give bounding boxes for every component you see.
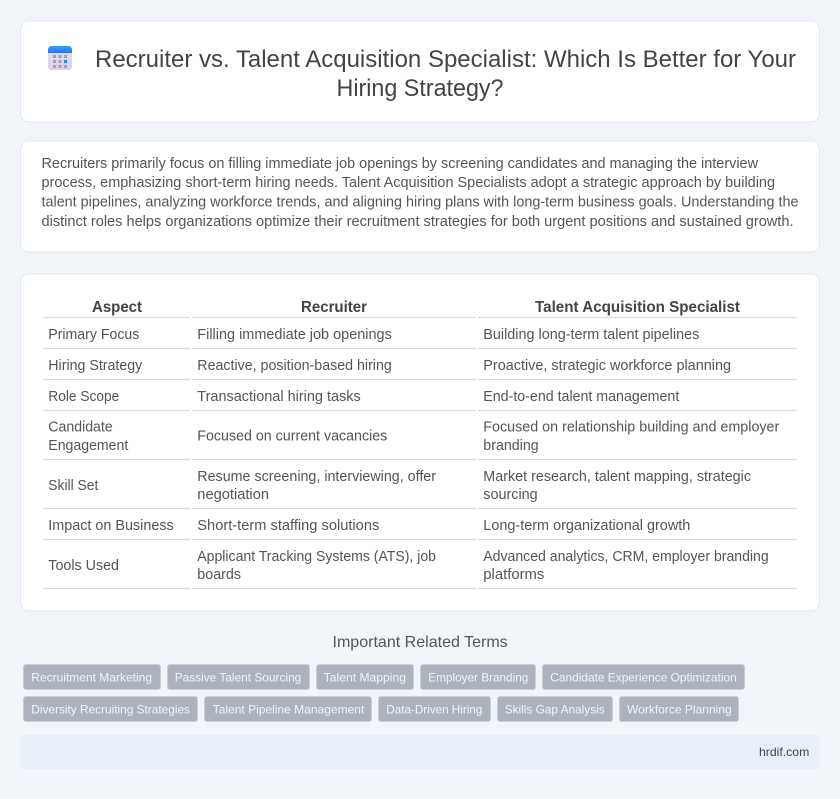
footer bbox=[20, 735, 820, 769]
tag bbox=[24, 664, 160, 690]
panel: introduction bbox=[20, 141, 820, 252]
title bbox=[95, 46, 796, 102]
row: role scope: Transactional hiring tasks bbox=[197, 389, 361, 405]
row: tools used: Applicant Tracking Systems (ATS), job bbox=[197, 549, 436, 565]
row: tools used: boards bbox=[197, 567, 241, 583]
row: primary focus: Primary Focus bbox=[48, 327, 139, 343]
tag: Talent Pipeline Management bbox=[213, 702, 365, 716]
tag bbox=[542, 664, 744, 690]
tag bbox=[498, 696, 612, 722]
row: skill set: Skill Set bbox=[48, 478, 98, 494]
row: impact on business: Impact on Business bbox=[48, 518, 174, 534]
row: impact on business: Short-term staffing solutions bbox=[197, 518, 379, 534]
row: role scope bbox=[48, 389, 679, 405]
icon: calendar bbox=[48, 46, 72, 70]
tag: Data-Driven Hiring bbox=[386, 702, 482, 716]
footer: hrdif.com bbox=[759, 745, 809, 759]
row: candidate engagement: branding bbox=[483, 438, 539, 454]
tag: Skills Gap Analysis bbox=[505, 702, 605, 716]
text block: introduction bbox=[42, 156, 798, 230]
tag bbox=[620, 696, 738, 722]
row: candidate engagement: Engagement bbox=[48, 438, 128, 454]
row: skill set: negotiation bbox=[197, 487, 269, 503]
row: tools used bbox=[48, 549, 769, 583]
row: skill set: sourcing bbox=[483, 487, 538, 503]
table header row: Recruiter bbox=[301, 299, 367, 316]
tag bbox=[420, 664, 536, 690]
tag: Diversity Recruiting Strategies bbox=[31, 702, 190, 716]
tag bbox=[378, 696, 490, 722]
table header row bbox=[92, 299, 741, 316]
heading: important related terms: Important Related Terms bbox=[332, 634, 508, 651]
row: hiring strategy bbox=[48, 358, 731, 374]
tag: Employer Branding bbox=[428, 670, 528, 684]
title: Recruiter vs. Talent Acquisition Specialist: Which Is Better for Your bbox=[95, 46, 796, 73]
row: primary focus: Building long-term talent pipelines bbox=[483, 327, 699, 343]
row: skill set bbox=[48, 469, 751, 503]
row: impact on business: Long-term organizational growth bbox=[483, 518, 690, 534]
row: candidate engagement: Focused on current vacancies bbox=[197, 429, 387, 445]
tag bbox=[204, 696, 372, 722]
row: impact on business bbox=[48, 518, 690, 534]
tag: Talent Mapping bbox=[324, 670, 406, 684]
tag: Passive Talent Sourcing bbox=[175, 670, 301, 684]
row: tools used: Tools Used bbox=[48, 558, 119, 574]
text block: introduction: process, emphasizing short-term hiring needs. Talent Acquisition Specialists adopt a strategic approach by building bbox=[42, 175, 775, 191]
table header row: Aspect bbox=[92, 299, 143, 316]
text block: introduction: Recruiters primarily focus on filling immediate job openings by screening candidates and managing the interview bbox=[42, 156, 759, 172]
title: Hiring Strategy? bbox=[336, 75, 504, 102]
row: skill set: Resume screening, interviewing, offer bbox=[197, 469, 436, 485]
row: skill set: Market research, talent mapping, strategic bbox=[483, 469, 751, 485]
row: tools used: platforms bbox=[483, 567, 544, 583]
panel: header bbox=[20, 21, 820, 122]
tag: Workforce Planning bbox=[627, 702, 732, 716]
row: primary focus bbox=[48, 327, 699, 343]
tag: Recruitment Marketing bbox=[31, 670, 152, 684]
table header row: Talent Acquisition Specialist bbox=[535, 299, 741, 316]
tag: Candidate Experience Optimization bbox=[550, 670, 737, 684]
row: hiring strategy: Hiring Strategy bbox=[48, 358, 143, 374]
tag bbox=[24, 696, 198, 722]
row: role scope: End-to-end talent management bbox=[483, 389, 679, 405]
row: candidate engagement: Candidate bbox=[48, 420, 113, 436]
row: primary focus: Filling immediate job openings bbox=[197, 327, 392, 343]
row: hiring strategy: Proactive, strategic workforce planning bbox=[483, 358, 731, 374]
row: candidate engagement bbox=[48, 420, 779, 454]
text block: introduction: talent pipelines, analyzing workforce trends, and aligning hiring plans with long-term business goals. Understanding the bbox=[42, 194, 798, 210]
row: tools used: Advanced analytics, CRM, employer branding bbox=[483, 549, 769, 565]
tag bbox=[168, 664, 310, 690]
row: candidate engagement: Focused on relationship building and employer bbox=[483, 420, 779, 436]
tags: related terms bbox=[24, 664, 744, 722]
panel: comparison table bbox=[20, 274, 820, 611]
text block: introduction: distinct roles helps organizations optimize their recruitment strategies for both urgent positions and sustained growth. bbox=[42, 214, 794, 230]
row: hiring strategy: Reactive, position-based hiring bbox=[197, 358, 392, 374]
row: role scope: Role Scope bbox=[48, 389, 119, 405]
tag bbox=[316, 664, 414, 690]
